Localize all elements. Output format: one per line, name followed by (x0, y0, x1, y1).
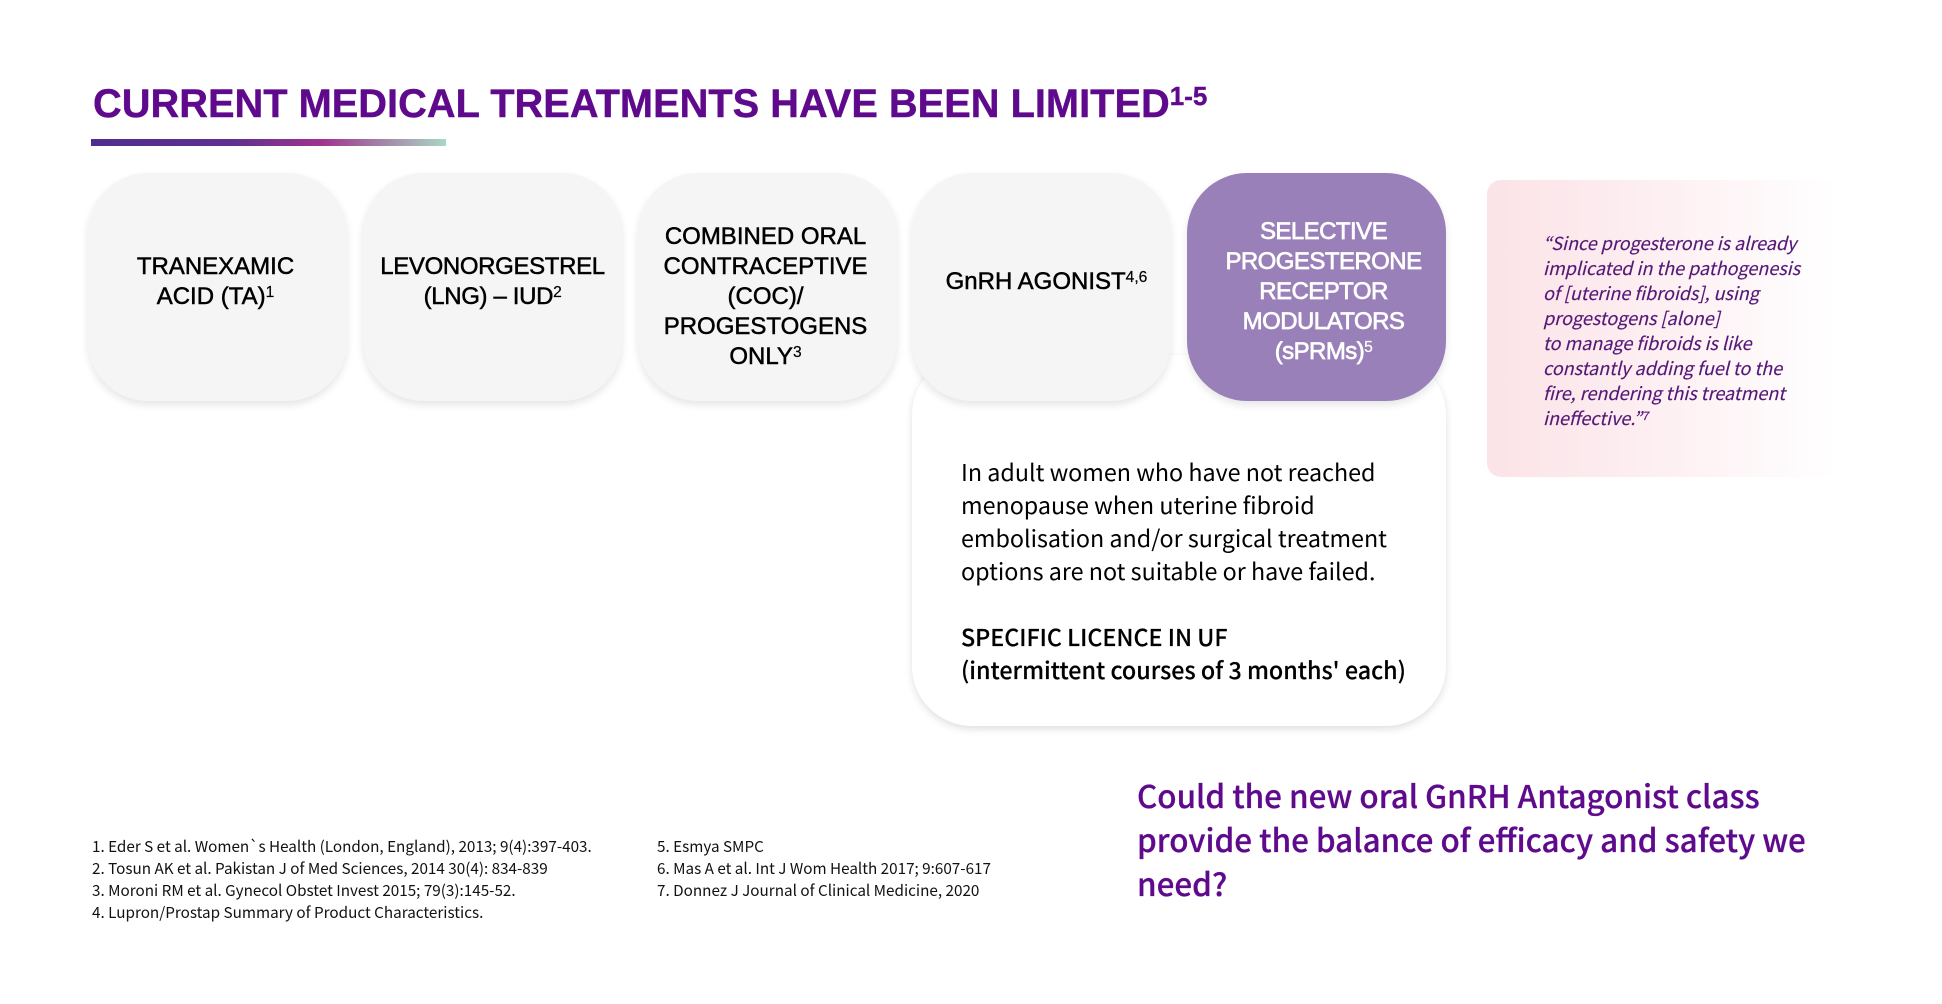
label: COMBINED ORAL (665, 223, 866, 250)
quote text: fire, rendering this treatment (1543, 380, 1785, 406)
references column 1: 1. Eder S et al. Women`s Health (London, England), 2013; 9(4):397-403. (92, 835, 592, 857)
label (663, 223, 868, 370)
label: CONTRACEPTIVE (663, 253, 868, 280)
label: (COC)/ (728, 283, 803, 310)
licence text (961, 619, 1406, 686)
licence text: SPECIFIC LICENCE IN UF (961, 619, 1228, 653)
indication text: In adult women who have not reached (961, 454, 1375, 488)
label: MODULATORS (1243, 308, 1404, 335)
title: CURRENT MEDICAL TREATMENTS HAVE BEEN LIMITED1-5 (93, 81, 1207, 126)
panel: GnRH agonist detail (912, 355, 1446, 726)
indication text: options are not suitable or have failed. (961, 553, 1375, 587)
label: (sPRMs)5 (1275, 338, 1372, 365)
quote text: ineffective.”7 (1543, 405, 1648, 431)
quote text: of [uterine fibroids], using (1543, 280, 1759, 306)
panel: GnRH agonist (912, 173, 1171, 401)
quote text: constantly adding fuel to the (1543, 355, 1782, 381)
references column 1: 3. Moroni RM et al. Gynecol Obstet Invest 2015; 79(3):145-52. (92, 879, 516, 901)
indication text: menopause when uterine fibroid (961, 487, 1315, 521)
references column 2: 5. Esmya SMPC (657, 835, 764, 857)
panel: combined oral contraceptive (638, 173, 897, 401)
panel: selective progesterone receptor modulators (1187, 173, 1446, 401)
label: PROGESTERONE (1225, 248, 1422, 275)
quote text: progestogens [alone] (1543, 305, 1720, 331)
label (137, 253, 294, 310)
references column 1 (92, 835, 592, 923)
label: SELECTIVE (1260, 218, 1387, 245)
label: ONLY3 (729, 343, 802, 370)
closing question (1137, 773, 1806, 906)
quote text: “Since progesterone is already (1543, 230, 1796, 256)
label (380, 253, 605, 310)
references column 1: 2. Tosun AK et al. Pakistan J of Med Sciences, 2014 30(4): 834-839 (92, 857, 548, 879)
references column 1: 4. Lupron/Prostap Summary of Product Characteristics. (92, 901, 483, 923)
label: LEVONORGESTREL (380, 253, 605, 280)
quote text (1543, 230, 1802, 431)
licence text: (intermittent courses of 3 months' each) (961, 652, 1406, 686)
panel: tranexamic acid (88, 173, 347, 401)
label: PROGESTOGENS (664, 313, 867, 340)
label: ACID (TA)1 (157, 283, 274, 310)
quote text: implicated in the pathogenesis (1543, 255, 1800, 281)
title underline gradient bar (91, 139, 446, 146)
references column 2: 6. Mas A et al. Int J Wom Health 2017; 9:607-617 (657, 857, 991, 879)
label: TRANEXAMIC (137, 253, 294, 280)
quote text: to manage fibroids is like (1543, 330, 1751, 356)
closing question: need? (1137, 861, 1227, 906)
panel: levonorgestrel (363, 173, 622, 401)
closing question: Could the new oral GnRH Antagonist class (1137, 773, 1760, 818)
references column 2 (657, 835, 991, 901)
references column 2: 7. Donnez J Journal of Clinical Medicine, 2020 (657, 879, 979, 901)
label: GnRH AGONIST4,6 (946, 268, 1147, 295)
panel: quote (1487, 180, 1837, 477)
label (1225, 218, 1422, 365)
label: RECEPTOR (1259, 278, 1388, 305)
indication text: embolisation and/or surgical treatment (961, 520, 1387, 554)
closing question: provide the balance of efficacy and safety we (1137, 817, 1806, 862)
label: (LNG) – IUD2 (424, 283, 561, 310)
indication text (961, 454, 1387, 587)
